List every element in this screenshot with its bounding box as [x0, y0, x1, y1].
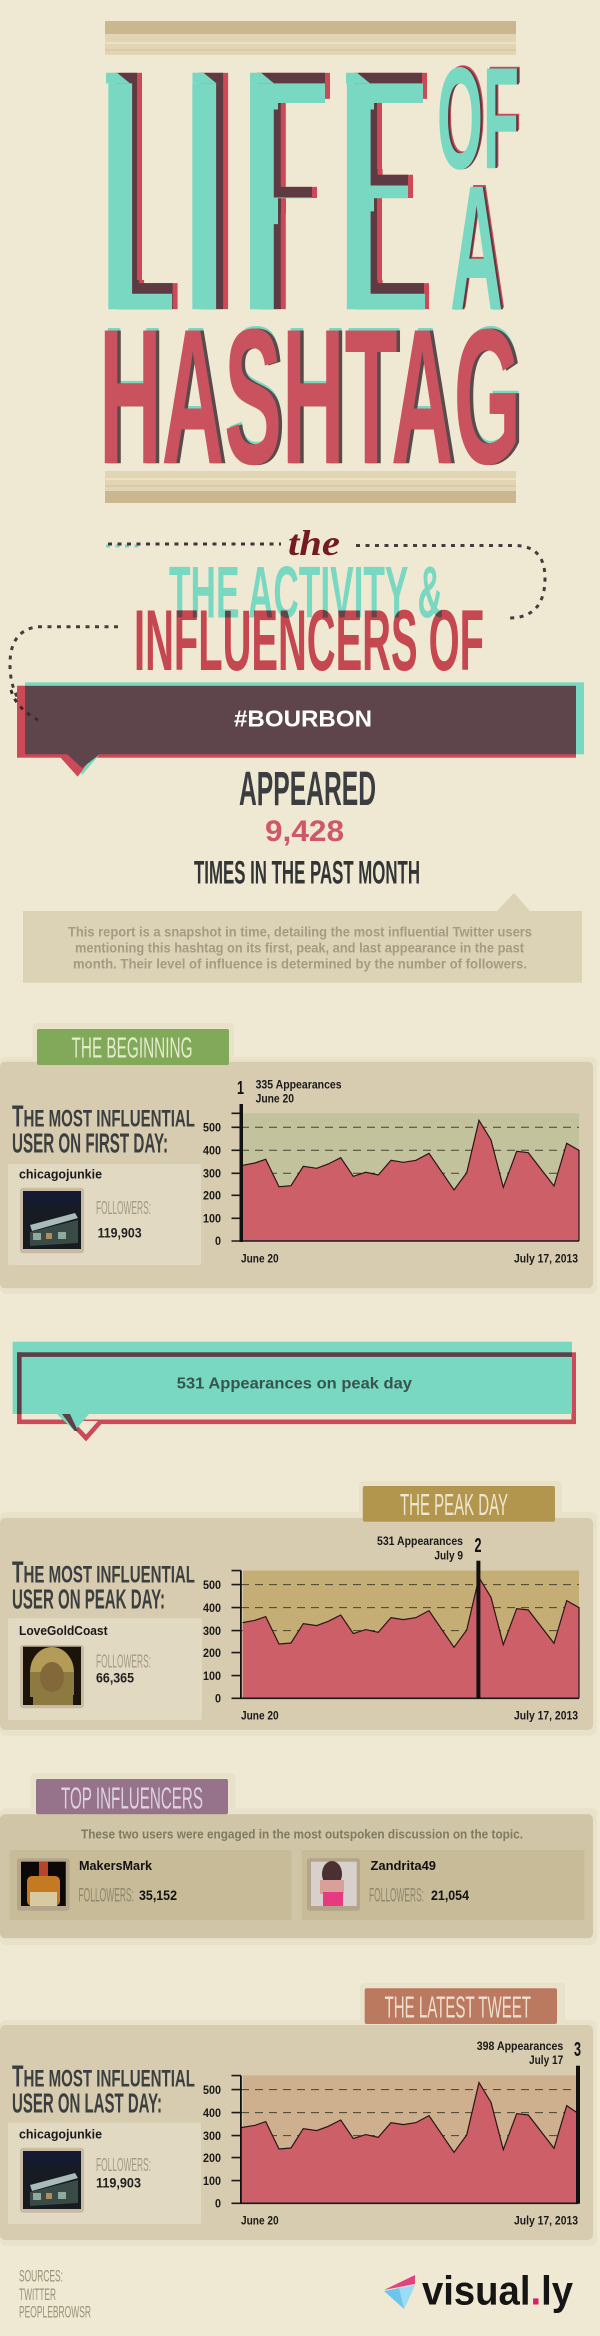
title letter L: L [94, 0, 236, 383]
panel: top influencers [0, 1773, 597, 1945]
title letter L: L [87, 10, 229, 394]
avatar: blonde woman [23, 1647, 81, 1705]
user card: MakersMark: 35,152 [139, 1888, 177, 1903]
marker label: peak day: 531 Appearances [377, 1534, 463, 1548]
title letter F: F [241, 0, 397, 383]
user card: chicagojunkie last day: 119,903 [96, 2176, 141, 2191]
avatar: bourbon bottle [21, 1862, 66, 1906]
avatar: building at night [23, 1191, 81, 1249]
area chart: peak day: June 20 [241, 1709, 279, 1723]
tab: the beginning: THE BEGINNING [72, 1032, 192, 1064]
title: LIFE OF A HASHTAG: A [450, 148, 503, 347]
area chart: first day: 100 [203, 1212, 221, 1226]
area chart: last day: 500 [203, 2083, 221, 2097]
dotted path: top left [106, 544, 281, 546]
heading: most influential user on first day [12, 1100, 195, 1159]
user card: Zandrita49: FOLLOWERS: [369, 1886, 424, 1907]
heading: most influential user on last day [12, 2060, 195, 2119]
area chart: last day: June 20 [241, 2214, 279, 2228]
text: PEOPLEBROWSR [19, 2303, 91, 2322]
intro text [68, 925, 532, 971]
intro text: month. Their level of influence is determined by the number of followers. [73, 956, 527, 971]
sources [19, 2267, 91, 2322]
title letter L [106, 72, 178, 310]
intro text panel [23, 893, 582, 983]
user card: chicagojunkie last day [8, 2123, 201, 2224]
user card: LoveGoldCoast: FOLLOWERS: [96, 1651, 151, 1671]
sources: TWITTER [19, 2285, 56, 2304]
decorative band: bottom [105, 471, 516, 503]
title word A [450, 146, 506, 347]
hashtag banner [11, 682, 584, 777]
area chart: peak day: 300 [203, 1624, 221, 1638]
title letter E: E [333, 0, 503, 383]
title letter E: E [338, 0, 508, 383]
area chart: last day: 200 [203, 2151, 221, 2165]
area chart: last day: 100 [203, 2174, 221, 2188]
user card: MakersMark [10, 1850, 292, 1920]
panel: the latest tweet [0, 1983, 597, 2246]
area chart: first day: 300 [203, 1166, 221, 1180]
marker label: peak day [377, 1534, 463, 1562]
area chart: first day: July 17, 2013 [514, 1251, 578, 1265]
marker label: first day: June 20 [256, 1091, 294, 1105]
user card: Zandrita49: 21,054 [431, 1888, 469, 1903]
avatar: woman in pink [311, 1861, 357, 1906]
tab: the beginning [37, 1029, 229, 1065]
area chart: first day: 0 [215, 1234, 221, 1248]
user card: LoveGoldCoast: 66,365 [96, 1671, 134, 1686]
callout: peak day [13, 1342, 574, 1438]
dotted path: right loop [356, 546, 545, 618]
user card: chicagojunkie: chicagojunkie [19, 1166, 102, 1181]
title: LIFE OF A HASHTAG [104, 65, 520, 466]
user card: chicagojunkie last day: FOLLOWERS: [96, 2155, 151, 2175]
area chart: first day: June 20 [241, 1251, 279, 1265]
panel: the beginning [0, 1023, 597, 1294]
area chart: last day: 0 [215, 2196, 221, 2210]
user card: Zandrita49: Zandrita49 [370, 1858, 436, 1873]
tab: top influencers: TOP INFLUENCERS [61, 1780, 203, 1815]
area chart: peak day: 0 [215, 1691, 221, 1705]
area chart: peak day: 400 [203, 1601, 221, 1615]
title letter F: F [229, 10, 385, 394]
marker label: first day: 335 Appearances [256, 1077, 342, 1091]
heading: most influential user on peak day: USER ON PEAK DAY: [12, 1583, 165, 1614]
intro text: mentioning this hashtag on its first, peak, and last appearance in the past [75, 941, 524, 956]
panel: the peak day [0, 1481, 597, 1736]
area chart: first day [203, 1077, 579, 1265]
title letter I: I [169, 10, 240, 394]
stat: total appearances: 9,428 [265, 815, 344, 848]
sentence: outspoken discussion: These two users were engaged in the most outspoken discussion on the topic. [81, 1826, 523, 1841]
avatar: building at night [23, 2151, 81, 2209]
area chart: last day: 300 [203, 2129, 221, 2143]
title letter L: L [99, 0, 241, 383]
decorative band: top [105, 21, 516, 55]
hashtag text: #BOURBON [234, 706, 372, 732]
area chart: first day: 400 [203, 1144, 221, 1158]
heading: most influential user on first day: USER ON FIRST DAY: [12, 1128, 168, 1159]
heading: most influential user on peak day [12, 1555, 195, 1614]
marker label: last day [477, 2039, 564, 2067]
user card: chicagojunkie [8, 1164, 201, 1265]
title letter E [346, 72, 429, 310]
title word OF [437, 36, 522, 199]
area chart: first day: 500 [203, 1120, 221, 1134]
area chart: last day [203, 2039, 581, 2228]
heading: most influential user on first day: THE MOST INFLUENTIAL [12, 1100, 195, 1134]
user card: Zandrita49 [302, 1850, 584, 1920]
area chart: peak day: 100 [203, 1669, 221, 1683]
marker label: peak day: July 9 [434, 1548, 463, 1562]
intro text: This report is a snapshot in time, detailing the most influential Twitter users [68, 925, 532, 940]
callout text: 531 Appearances on peak day [177, 1375, 412, 1392]
subtitle word: the: the [288, 523, 340, 563]
marker label: last day: 398 Appearances [477, 2039, 564, 2053]
icon: gem [384, 2275, 415, 2309]
title: LIFE OF A HASHTAG: A [453, 146, 506, 346]
logo: visual.ly: visual.ly [422, 2267, 573, 2313]
user card: LoveGoldCoast: LoveGoldCoast [19, 1623, 108, 1638]
tab: top influencers [36, 1779, 228, 1815]
area chart: last day: July 17, 2013 [514, 2214, 578, 2228]
marker 1: 1 [237, 1078, 244, 1098]
title: LIFE OF A HASHTAG: A [452, 148, 505, 347]
area chart: last day: 400 [203, 2106, 221, 2120]
tab: the peak day [363, 1486, 555, 1522]
dotted path: left loop [10, 627, 118, 720]
user card: MakersMark: FOLLOWERS: [78, 1886, 134, 1907]
marker 2: 2 [474, 1535, 482, 1557]
heading: most influential user on peak day: THE MOST INFLUENTIAL [12, 1555, 195, 1589]
user card: chicagojunkie: FOLLOWERS: [96, 1198, 151, 1218]
marker label: last day: July 17 [529, 2053, 564, 2067]
title letter E: E [326, 10, 496, 394]
heading: appeared: APPEARED [239, 763, 376, 816]
area chart: peak day: 200 [203, 1646, 221, 1660]
title letter F: F [236, 0, 392, 383]
title letter I: I [176, 0, 247, 383]
user card: chicagojunkie last day: chicagojunkie [19, 2126, 102, 2141]
user card: chicagojunkie: 119,903 [98, 1226, 142, 1241]
title letter I [192, 72, 228, 310]
area chart: peak day [203, 1534, 579, 1723]
heading: most influential user on last day: USER ON LAST DAY: [12, 2088, 162, 2119]
area chart: first day: 200 [203, 1188, 221, 1202]
user card: MakersMark: MakersMark [79, 1858, 153, 1873]
heading: most influential user on last day: THE MOST INFLUENTIAL [12, 2060, 195, 2094]
marker 3: 3 [574, 2039, 581, 2061]
sources: SOURCES: [19, 2267, 63, 2286]
area chart: peak day: July 17, 2013 [514, 1709, 578, 1723]
user card: LoveGoldCoast [8, 1618, 202, 1720]
title letter I: I [181, 0, 252, 383]
title letter F [250, 72, 330, 310]
area chart: peak day: 500 [203, 1578, 221, 1592]
marker label: first day [256, 1077, 342, 1105]
